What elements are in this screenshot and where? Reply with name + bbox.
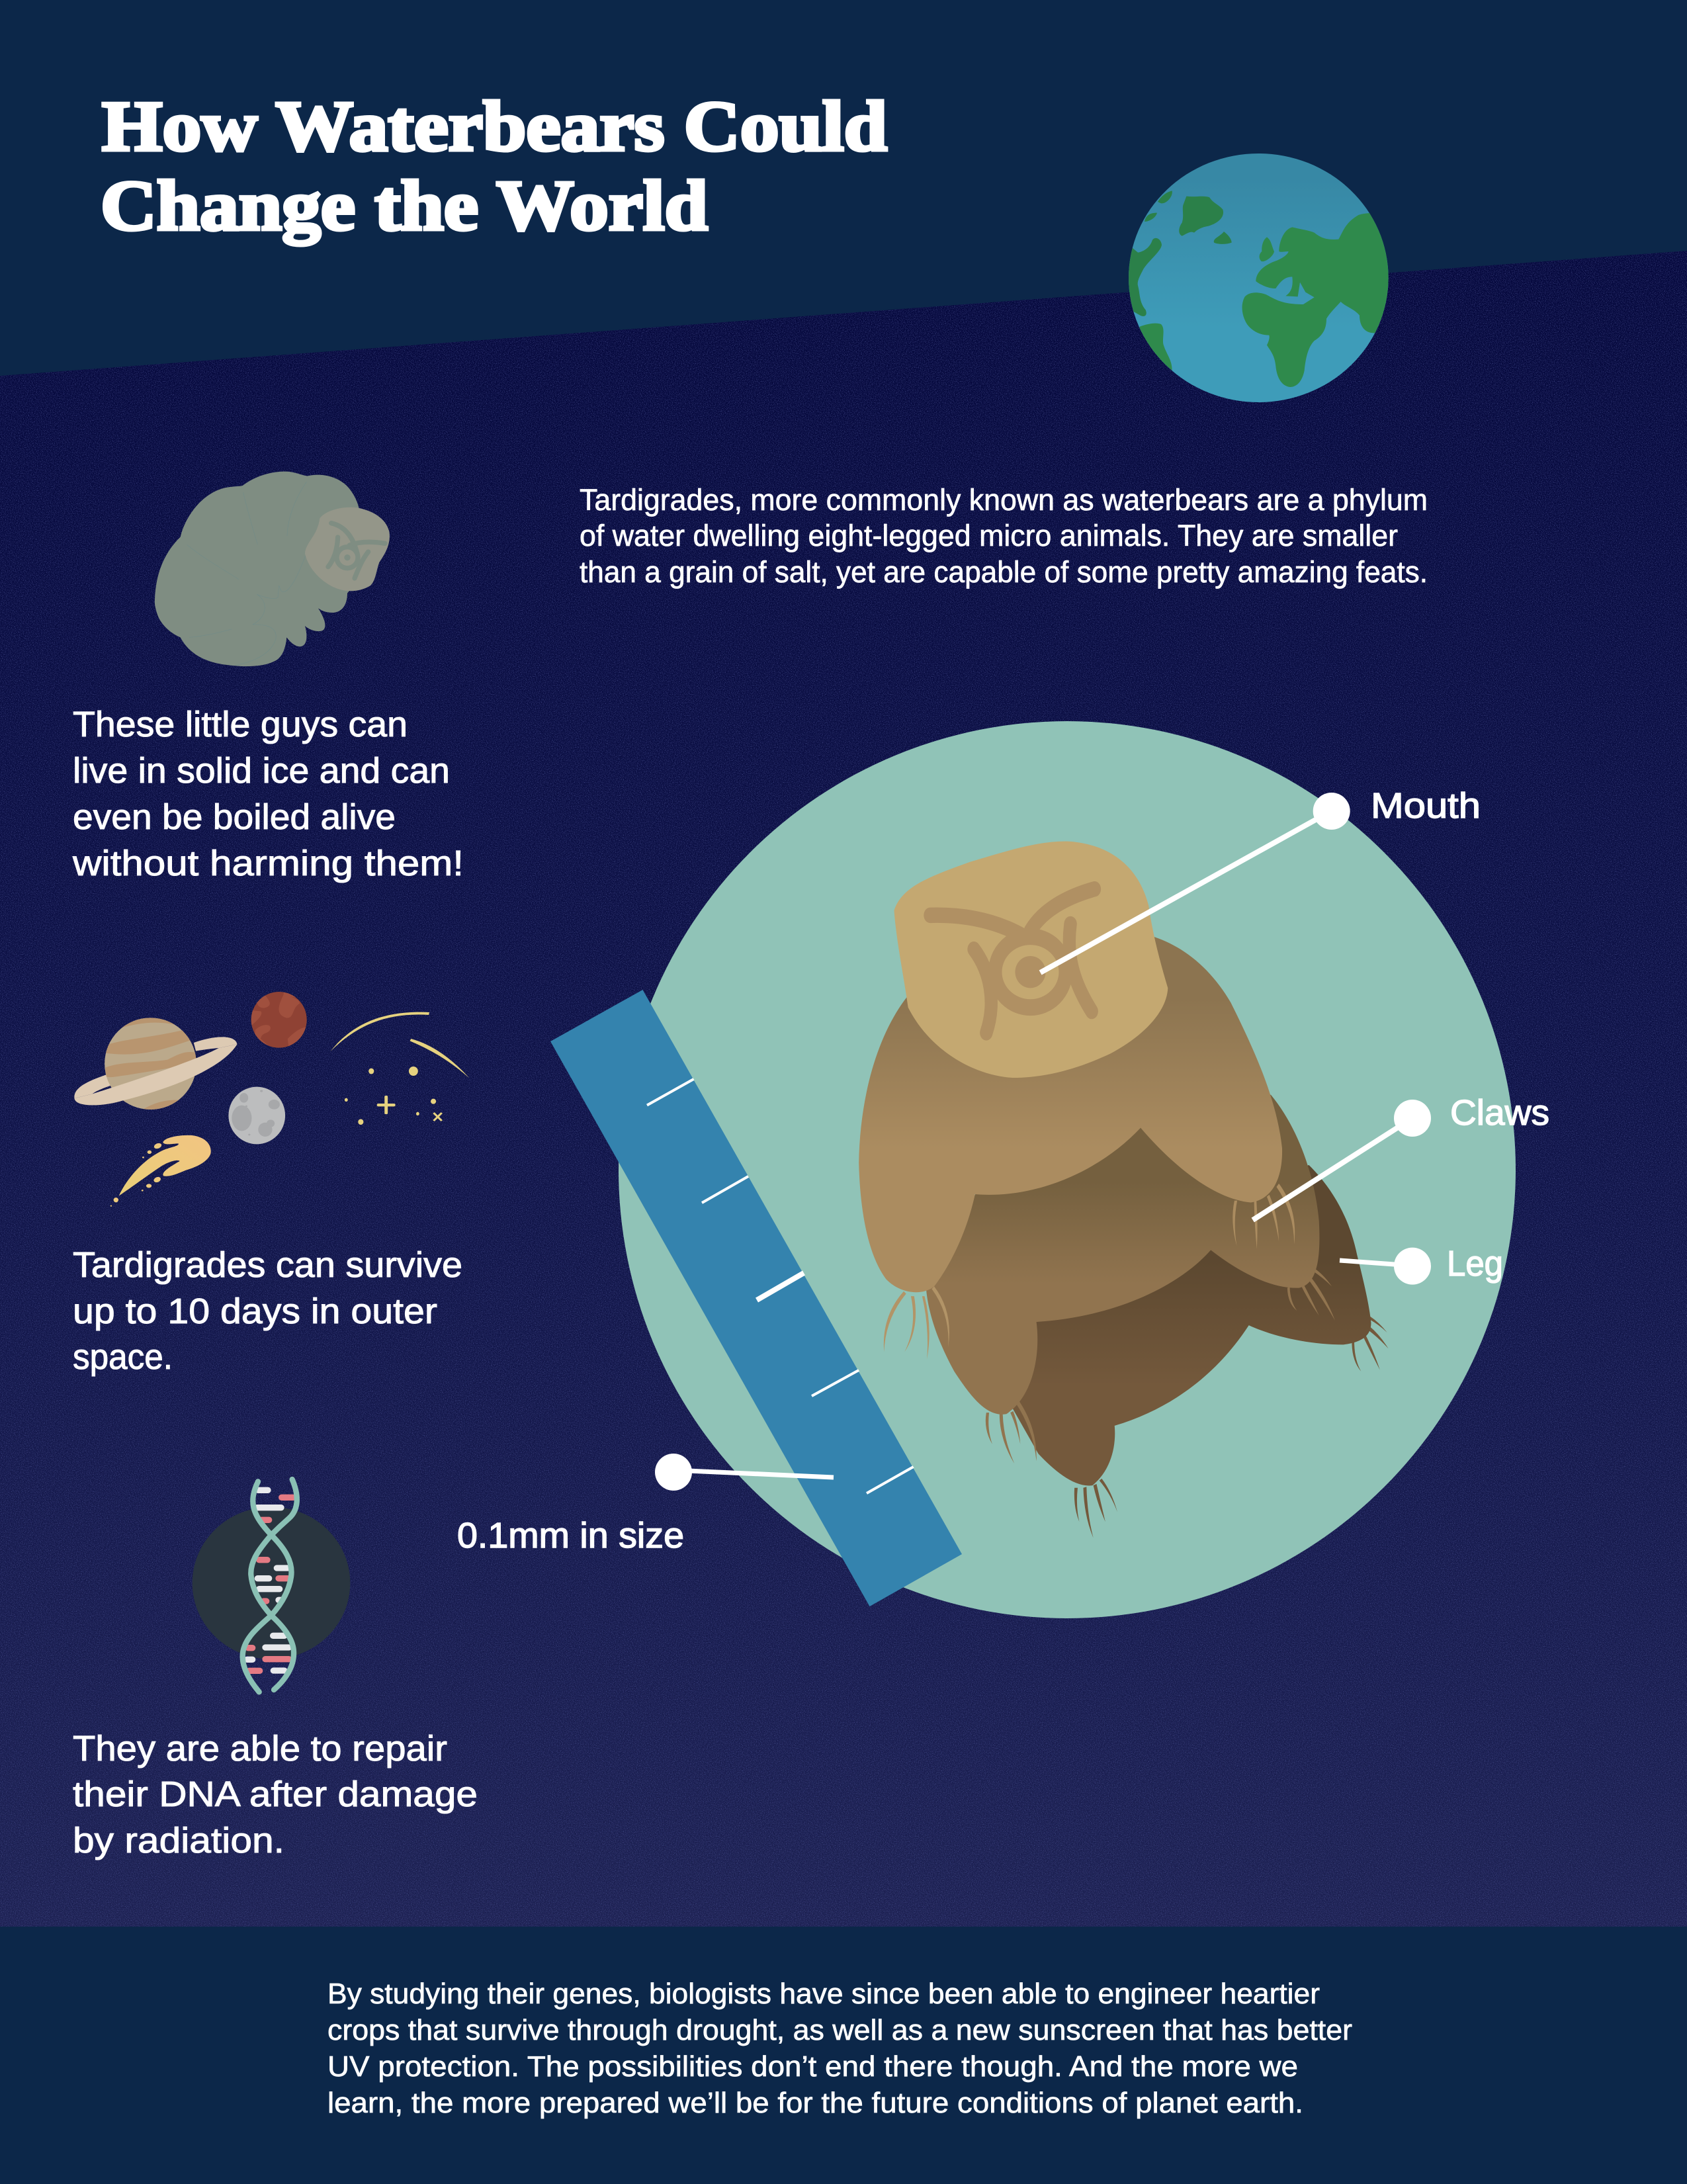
ruler [550, 990, 962, 1606]
text: ice and boiling: live in solid ice and can [73, 751, 450, 791]
title: How Waterbears Could [102, 87, 887, 166]
stars [330, 1012, 469, 1125]
text: dna repair: They are able to repair [73, 1729, 447, 1769]
intro text [580, 483, 1428, 589]
mars [251, 992, 307, 1048]
text: ice and boiling: These little guys can [73, 705, 408, 744]
intro text: Tardigrades, more commonly known as waterbears are a phylum [580, 483, 1428, 517]
back legs and body [994, 1165, 1389, 1538]
intro text: than a grain of salt, yet are capable of some pretty amazing feats. [580, 555, 1428, 589]
saturn [74, 1017, 237, 1114]
callout: claws [1253, 1093, 1549, 1220]
front legs and body [859, 935, 1295, 1359]
intro text: of water dwelling eight-legged micro animals. They are smaller [580, 519, 1398, 552]
text: dna repair: by radiation. [73, 1821, 284, 1860]
middle legs and body [926, 1085, 1335, 1463]
footer text [327, 1978, 1352, 2119]
callout: leg: Leg [1447, 1244, 1503, 1284]
text: ice and boiling: even be boiled alive [73, 797, 396, 837]
footer text: learn, the more prepared we’ll be for the future conditions of planet earth. [327, 2087, 1303, 2119]
title: Change the World [101, 167, 708, 245]
head [894, 842, 1168, 1078]
text: outer space [73, 1245, 462, 1377]
text: ice and boiling: without harming them! [72, 844, 464, 883]
icon: planets and stars [74, 990, 469, 1207]
comet [110, 1135, 211, 1207]
text: dna repair [73, 1729, 478, 1860]
text: dna repair: their DNA after damage [73, 1774, 478, 1814]
callout: mouth: Mouth [1371, 786, 1481, 826]
title [101, 87, 887, 245]
moon [228, 1087, 285, 1144]
icon: curled-up tardigrade [155, 472, 390, 666]
footer text: crops that survive through drought, as well as a new sunscreen that has better [327, 2014, 1352, 2046]
icon: dna helix [193, 1479, 350, 1692]
callout: size [457, 1454, 834, 1555]
teal circle [619, 721, 1516, 1618]
callout: mouth [1041, 786, 1481, 973]
text: outer space: Tardigrades can survive [73, 1245, 462, 1285]
text: ice and boiling [72, 705, 464, 883]
text: outer space: space. [73, 1337, 173, 1377]
callout: leg [1340, 1244, 1503, 1285]
footer text: UV protection. The possibilities don’t end there though. And the more we [327, 2050, 1298, 2083]
callout: size: 0.1mm in size [457, 1516, 684, 1555]
footer band [0, 1927, 1687, 2184]
callout: claws: Claws [1450, 1093, 1549, 1133]
text: outer space: up to 10 days in outer [73, 1291, 437, 1331]
icon: earth [1125, 153, 1398, 402]
illustration: waterbear [859, 842, 1389, 1538]
header band [0, 0, 1687, 376]
footer text: By studying their genes, biologists have since been able to engineer heartier [327, 1978, 1320, 2010]
